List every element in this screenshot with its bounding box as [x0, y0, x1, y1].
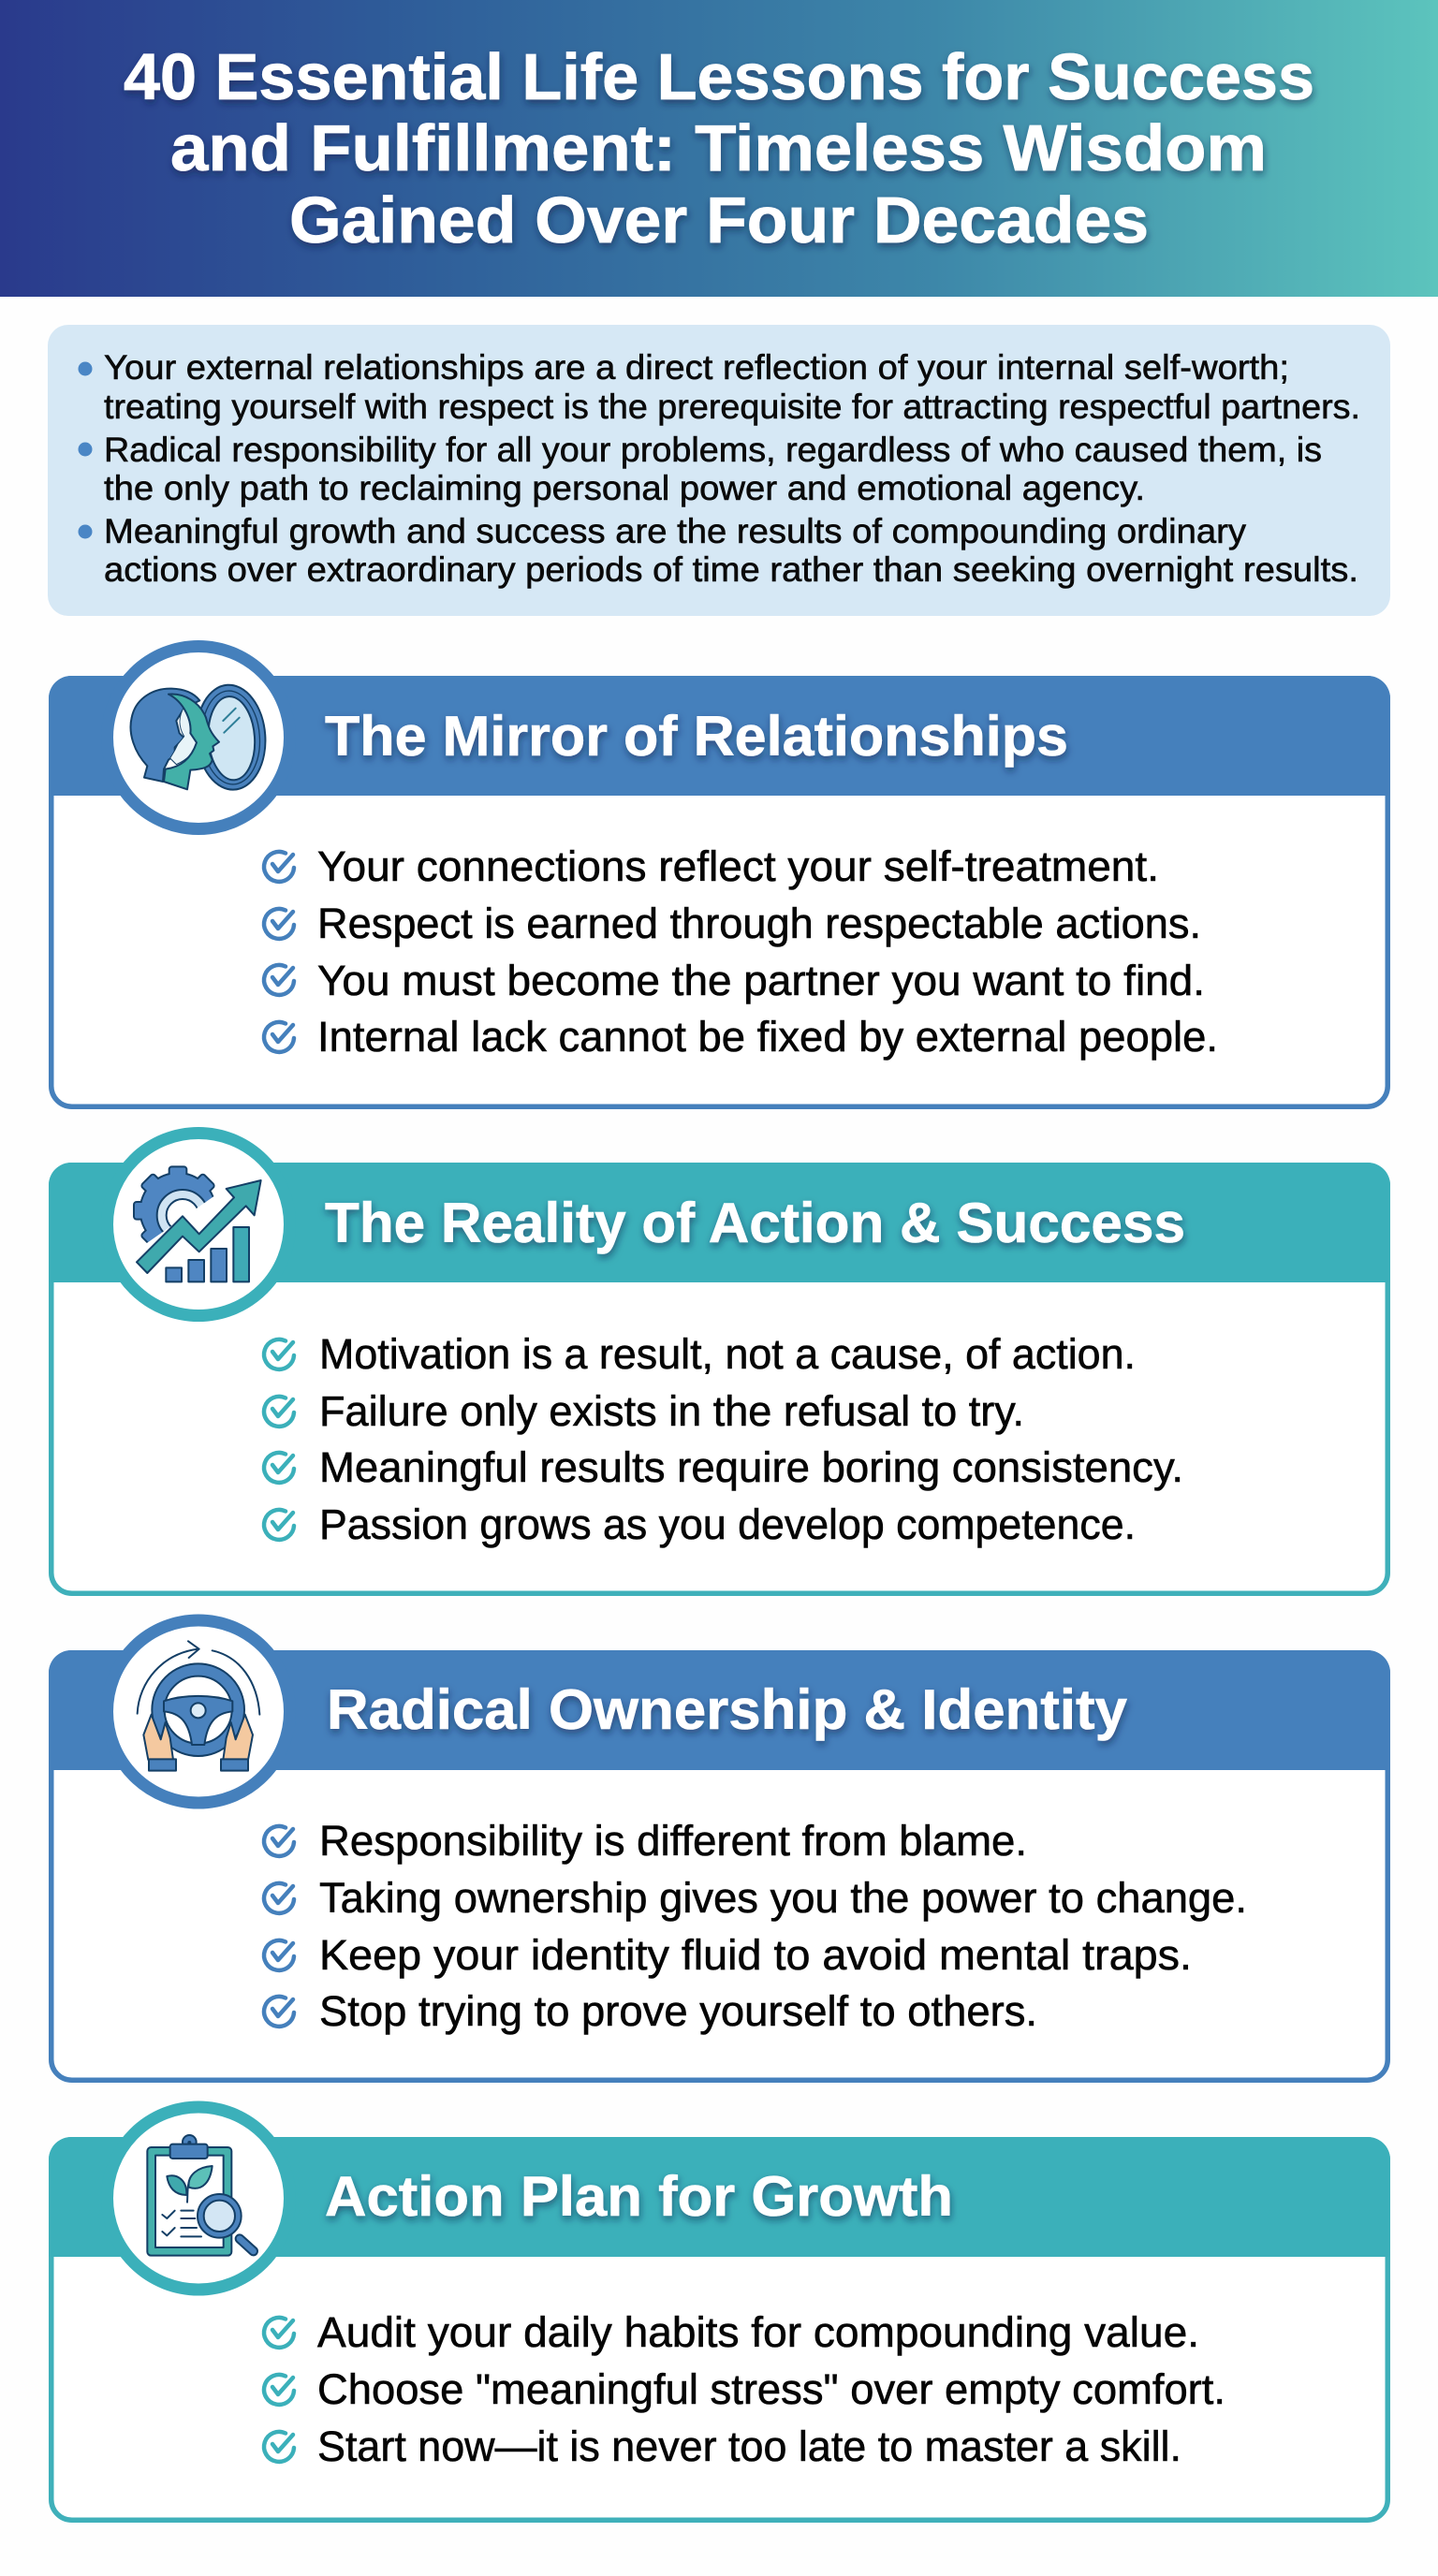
icon: clipboard and magnifier — [107, 2107, 290, 2290]
checklist — [264, 2308, 1225, 2470]
title: and Fulfillment: Timeless Wisdom — [170, 111, 1267, 184]
summary point 3 — [79, 512, 1358, 589]
checklist: Responsibility is different from blame. — [319, 1817, 1027, 1865]
checklist: Taking ownership gives you the power to change. — [319, 1874, 1247, 1922]
heading: The Reality of Action & Success — [325, 1192, 1185, 1254]
icon: gear and growth arrow — [107, 1133, 290, 1316]
checklist: Meaningful results require boring consistency. — [319, 1443, 1183, 1491]
heading: Radical Ownership & Identity — [327, 1678, 1128, 1741]
checklist: Stop trying to prove yourself to others. — [319, 1987, 1037, 2035]
checklist: Internal lack cannot be fixed by external people. — [317, 1013, 1218, 1061]
checklist: Keep your identity fluid to avoid mental traps. — [319, 1931, 1192, 1979]
title: Gained Over Four Decades — [289, 183, 1149, 256]
icon: head and mirror — [107, 646, 290, 829]
checklist: Motivation is a result, not a cause, of action. — [319, 1330, 1136, 1378]
checklist — [264, 842, 1218, 1061]
summary point 1 — [79, 348, 1360, 426]
checklist: You must become the partner you want to find. — [317, 957, 1205, 1004]
checklist: Your connections reflect your self-treatment. — [317, 842, 1159, 890]
checklist: Failure only exists in the refusal to try. — [319, 1387, 1024, 1435]
summary point 1: Your external relationships are a direct reflection of your internal self-worth; — [104, 348, 1289, 387]
icon: steering wheel — [107, 1620, 290, 1803]
summary point 2: the only path to reclaiming personal power and emotional agency. — [104, 469, 1145, 507]
heading: The Mirror of Relationships — [325, 705, 1068, 768]
summary point 1: treating yourself with respect is the prerequisite for attracting respectful partners. — [104, 388, 1360, 426]
title — [124, 40, 1314, 256]
panel: The Mirror of Relationships — [49, 646, 1390, 1106]
summary point 2 — [79, 431, 1322, 507]
checklist: Audit your daily habits for compounding value. — [317, 2308, 1199, 2356]
heading: Action Plan for Growth — [325, 2165, 953, 2228]
panel: The Reality of Action & Success — [49, 1133, 1390, 1593]
checklist — [264, 1817, 1247, 2035]
panel: summary — [48, 325, 1390, 616]
summary point 3: Meaningful growth and success are the results of compounding ordinary — [104, 512, 1247, 550]
checklist: Passion grows as you develop competence. — [319, 1500, 1136, 1548]
checklist: Choose "meaningful stress" over empty comfort. — [317, 2365, 1225, 2413]
checklist: Start now—it is never too late to master a skill. — [317, 2422, 1181, 2470]
summary point 2: Radical responsibility for all your problems, regardless of who caused them, is — [104, 431, 1322, 469]
title: 40 Essential Life Lessons for Success — [124, 40, 1314, 113]
summary point 3: actions over extraordinary periods of time rather than seeking overnight results. — [104, 550, 1358, 589]
checklist — [264, 1330, 1183, 1548]
checklist: Respect is earned through respectable actions. — [317, 900, 1201, 947]
panel: Action Plan for Growth — [49, 2107, 1390, 2520]
panel: Radical Ownership & Identity — [49, 1620, 1390, 2080]
header banner — [0, 0, 1438, 297]
